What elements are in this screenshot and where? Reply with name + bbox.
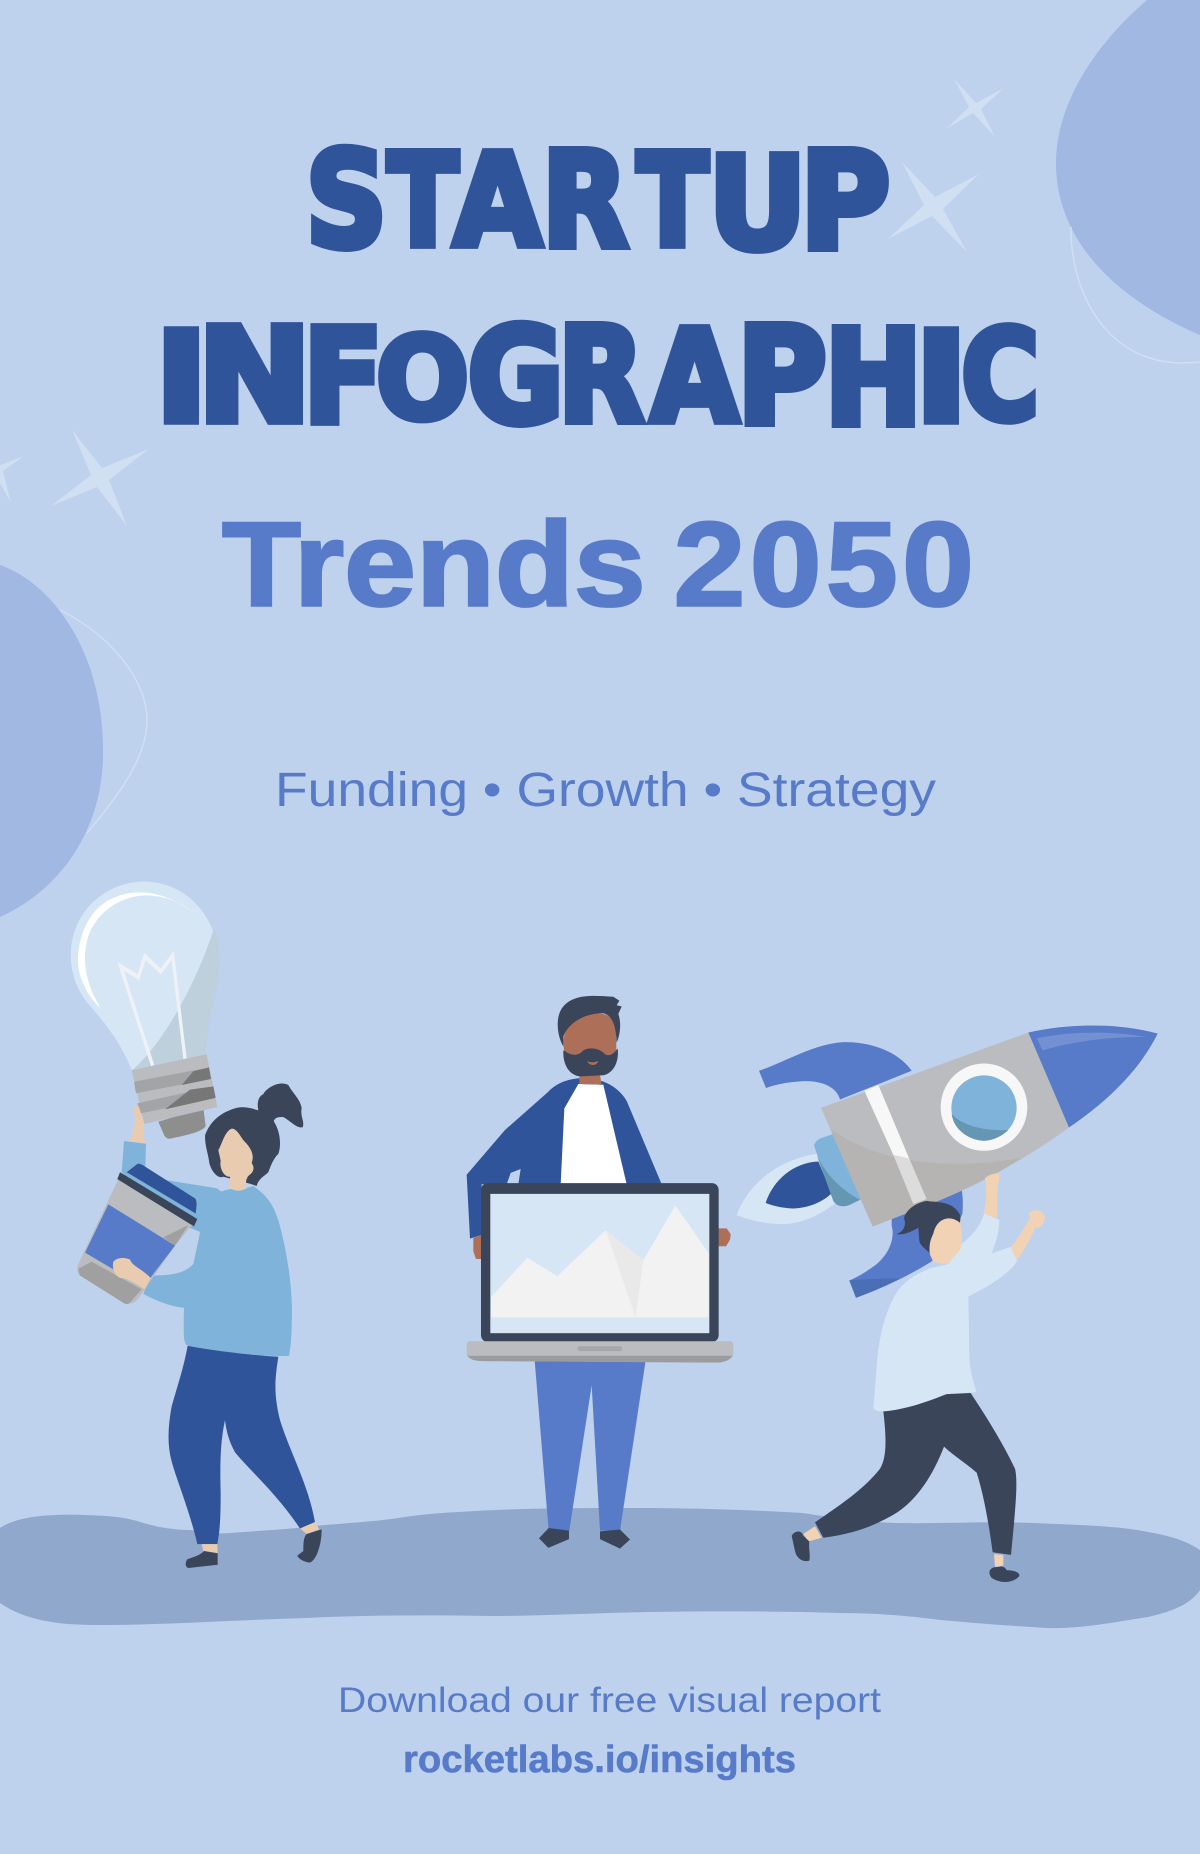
woman: hair	[205, 1083, 303, 1186]
figure: woman holding light bulb and jar	[71, 882, 322, 1568]
website link text: rocketlabs.io/insights	[403, 1739, 796, 1781]
ground	[0, 1508, 1200, 1628]
title line: INFOGRAPHIC	[155, 299, 1039, 456]
man: t-shirt	[561, 1084, 627, 1184]
title line: STARTUP: P	[800, 124, 890, 280]
woman: feet	[186, 1522, 322, 1568]
tagline: Funding • Growth • Strategy	[275, 764, 936, 817]
woman: face	[218, 1129, 253, 1191]
title line: STARTUP: A	[453, 127, 542, 276]
man: head	[558, 996, 622, 1076]
man: hands	[473, 1228, 731, 1259]
icon: rocket	[737, 1025, 1158, 1298]
title line: INFOGRAPHIC: N	[198, 301, 311, 452]
icon: jar	[77, 1164, 197, 1304]
woman: sleeve	[122, 1141, 223, 1232]
person: head	[897, 1201, 962, 1264]
call to action text: Download our free visual report	[338, 1681, 881, 1720]
title line: INFOGRAPHIC: I	[155, 305, 208, 451]
title line: STARTUP: R	[542, 124, 628, 277]
title line: STARTUP: S	[306, 125, 387, 278]
person: feet	[792, 1526, 1019, 1582]
man: trousers	[535, 1360, 646, 1531]
title line: STARTUP: T	[637, 128, 708, 276]
title line: INFOGRAPHIC: O	[376, 313, 469, 446]
woman: sweater	[143, 1186, 292, 1356]
figure: man holding laptop	[467, 996, 733, 1549]
background blob: top right	[1056, 0, 1200, 363]
title line: STARTUP	[306, 124, 890, 280]
title line: INFOGRAPHIC: G	[468, 299, 564, 454]
stars: top right	[888, 79, 1004, 252]
man: shoes	[539, 1528, 630, 1549]
man: jacket	[467, 1078, 662, 1239]
title line: INFOGRAPHIC: A	[650, 303, 739, 452]
figure: person carrying rocket	[737, 1025, 1158, 1582]
woman: trousers	[169, 1346, 315, 1544]
title line: STARTUP: T	[388, 128, 458, 276]
woman: raised hand	[129, 1105, 146, 1144]
person: trousers	[815, 1393, 1016, 1555]
person: raised arm	[983, 1173, 999, 1218]
title line: STARTUP: U	[708, 130, 807, 279]
background blob: left	[0, 565, 147, 917]
title line: INFOGRAPHIC: H	[824, 303, 922, 456]
title	[155, 124, 1039, 456]
title line: INFOGRAPHIC: R	[558, 299, 644, 452]
title line: INFOGRAPHIC: C	[961, 304, 1039, 449]
person: free arm	[1011, 1210, 1045, 1260]
woman: hand on jar	[113, 1258, 151, 1289]
title line: INFOGRAPHIC: I	[915, 305, 968, 451]
person: shirt	[873, 1214, 1017, 1411]
icon: laptop with chart	[467, 1183, 733, 1363]
icon: light bulb	[71, 882, 220, 1139]
title line: INFOGRAPHIC: P	[737, 300, 827, 455]
subtitle: Trends 2050: Trends 2050	[222, 498, 978, 631]
title line: INFOGRAPHIC: F	[303, 302, 383, 454]
man: neck	[579, 1075, 602, 1085]
stars: left	[0, 430, 149, 526]
